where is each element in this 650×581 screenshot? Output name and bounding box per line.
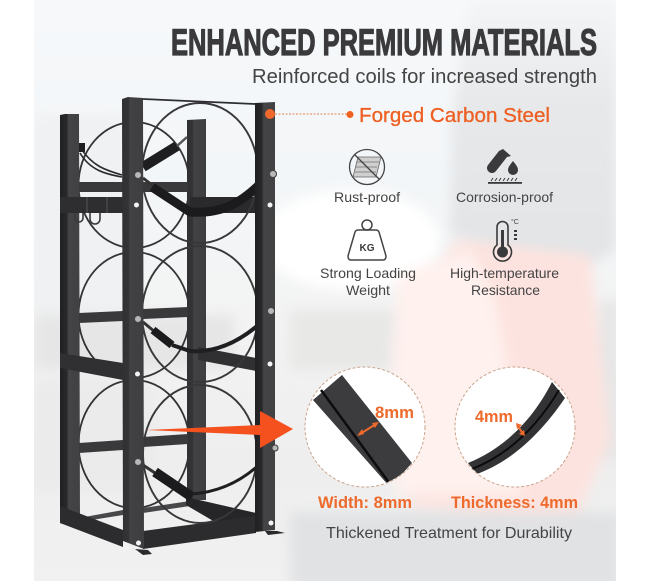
hooks — [75, 197, 107, 224]
detail circle: width — [305, 367, 425, 487]
front posts — [122, 97, 285, 555]
cross bars — [60, 182, 256, 549]
straps — [79, 137, 278, 497]
bolt holes — [134, 202, 274, 546]
detail circle: thickness: 4mm — [475, 407, 513, 426]
feature: strong loading weight — [320, 220, 416, 298]
top wire — [143, 99, 255, 104]
feature: strong loading weight: Weight — [346, 282, 390, 298]
back left rings — [78, 122, 190, 508]
product: cylinder rack — [60, 97, 285, 555]
feature: high-temperature resistance: High-temperature — [450, 265, 559, 281]
icon: test tube and drop — [487, 149, 522, 184]
back posts — [60, 114, 206, 528]
bolt heads on front posts — [134, 170, 278, 466]
callout: forged carbon steel: Forged Carbon Steel — [359, 105, 550, 127]
front rings — [142, 103, 258, 523]
subtitle: Reinforced coils for increased strength — [252, 66, 597, 88]
feature: rust-proof: Rust-proof — [334, 189, 400, 205]
dimension arrow — [357, 422, 379, 436]
icon: thermometer: °C — [511, 218, 519, 226]
feature: corrosion-proof — [456, 149, 553, 205]
callout: forged carbon steel — [265, 105, 550, 127]
detail circle: width: 8mm — [375, 403, 414, 422]
feature: corrosion-proof: Corrosion-proof — [456, 189, 553, 205]
icon: rust-proof — [350, 150, 384, 184]
label: width: Width: 8mm — [318, 494, 412, 512]
feature: strong loading weight: Strong Loading — [320, 265, 416, 281]
dimension arrow — [516, 423, 525, 436]
icon: KG weight: KG — [360, 243, 375, 254]
arrow — [146, 411, 293, 448]
feature: high-temperature resistance: Resistance — [471, 282, 540, 298]
detail circle: thickness — [455, 367, 575, 487]
feature: high-temperature resistance — [450, 218, 559, 298]
feature: rust-proof — [334, 150, 400, 205]
label: thickness: Thickness: 4mm — [451, 494, 578, 512]
caption: Thickened Treatment for Durability — [326, 525, 572, 542]
